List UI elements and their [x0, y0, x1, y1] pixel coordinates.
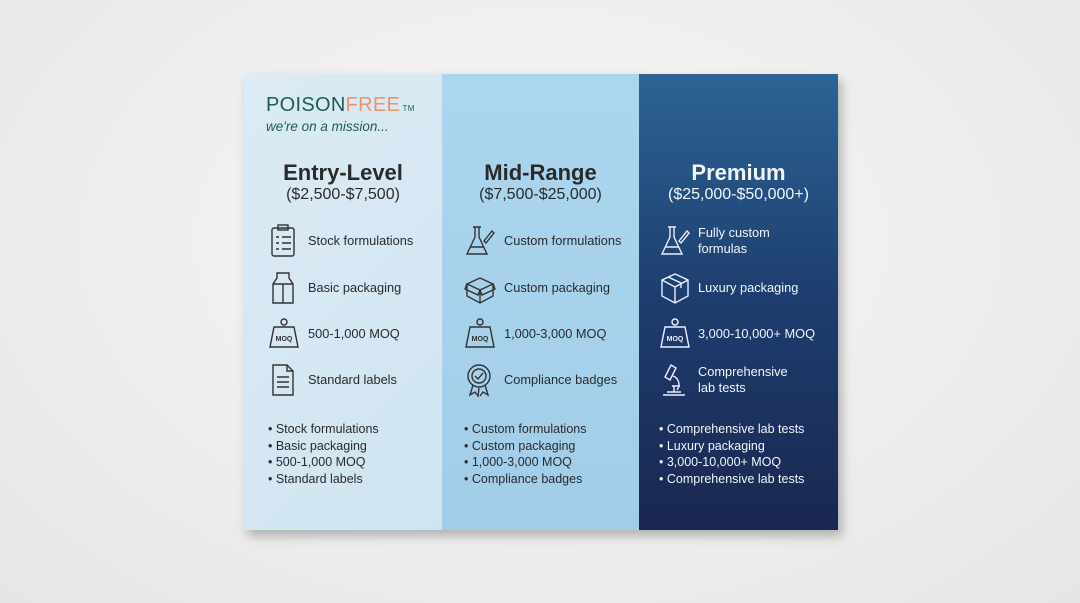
- feature: compliance badges: [467, 364, 617, 398]
- bullet list: • 3,000-10,000+ MOQ: [659, 455, 781, 469]
- card: [244, 74, 838, 530]
- feature: moq: [660, 318, 815, 348]
- heading: Mid-Range: [484, 160, 597, 185]
- price: ($25,000-$50,000+): [668, 186, 809, 203]
- feature: standard labels: [272, 364, 397, 396]
- feature: stock formulations: Stock formulations: [308, 233, 413, 248]
- feature: stock formulations: [271, 224, 413, 257]
- feature: basic packaging: [272, 272, 401, 304]
- bullet list: • Basic packaging: [268, 439, 367, 453]
- bullet list: [268, 422, 379, 486]
- feature: moq: 500-1,000 MOQ: [308, 326, 400, 341]
- bullet list: • Custom formulations: [464, 422, 586, 436]
- feature: fully custom formulas: Fully custom: [698, 225, 770, 240]
- feature: moq: 1,000-3,000 MOQ: [504, 326, 606, 341]
- logo: we're on a mission...: [266, 119, 389, 134]
- bullet list: [464, 422, 586, 486]
- bullet list: • 1,000-3,000 MOQ: [464, 455, 572, 469]
- price: ($2,500-$7,500): [286, 186, 400, 203]
- feature: luxury packaging: [661, 273, 798, 304]
- feature: moq: MOQ: [472, 336, 489, 343]
- feature: moq: 3,000-10,000+ MOQ: [698, 326, 815, 341]
- bullet list: • Comprehensive lab tests: [659, 472, 804, 486]
- heading: Premium: [691, 160, 786, 185]
- logo: POISONFREE TM: [266, 94, 415, 116]
- feature: custom formulations: Custom formulations: [504, 233, 621, 248]
- feature: custom packaging: [464, 277, 610, 304]
- feature: comprehensive lab tests: Comprehensive: [698, 364, 788, 379]
- price: ($7,500-$25,000): [479, 186, 602, 203]
- panel: premium: [639, 74, 838, 530]
- feature: moq: MOQ: [276, 336, 293, 343]
- feature: custom formulations: [466, 226, 621, 255]
- panel: entry-level: [244, 74, 442, 530]
- panel: mid-range: [442, 74, 639, 530]
- logo: [266, 94, 415, 134]
- feature: moq: [269, 318, 400, 348]
- heading: Entry-Level: [283, 160, 403, 185]
- feature: basic packaging: Basic packaging: [308, 280, 401, 295]
- bullet list: • Luxury packaging: [659, 439, 765, 453]
- bullet list: • Compliance badges: [464, 472, 582, 486]
- bullet list: • Stock formulations: [268, 422, 379, 436]
- bullet list: [659, 422, 804, 486]
- bullet list: • Custom packaging: [464, 439, 575, 453]
- feature: fully custom formulas: [661, 225, 770, 256]
- feature: moq: MOQ: [667, 336, 684, 343]
- feature: standard labels: Standard labels: [308, 372, 397, 387]
- bullet list: • Comprehensive lab tests: [659, 422, 804, 436]
- feature: comprehensive lab tests: [663, 364, 788, 396]
- feature: luxury packaging: Luxury packaging: [698, 280, 798, 295]
- bullet list: • 500-1,000 MOQ: [268, 455, 365, 469]
- feature: compliance badges: Compliance badges: [504, 372, 617, 387]
- bullet list: • Standard labels: [268, 472, 363, 486]
- feature: fully custom formulas: formulas: [698, 241, 747, 256]
- feature: moq: [465, 318, 606, 348]
- feature: comprehensive lab tests: lab tests: [698, 380, 746, 395]
- feature: custom packaging: Custom packaging: [504, 280, 610, 295]
